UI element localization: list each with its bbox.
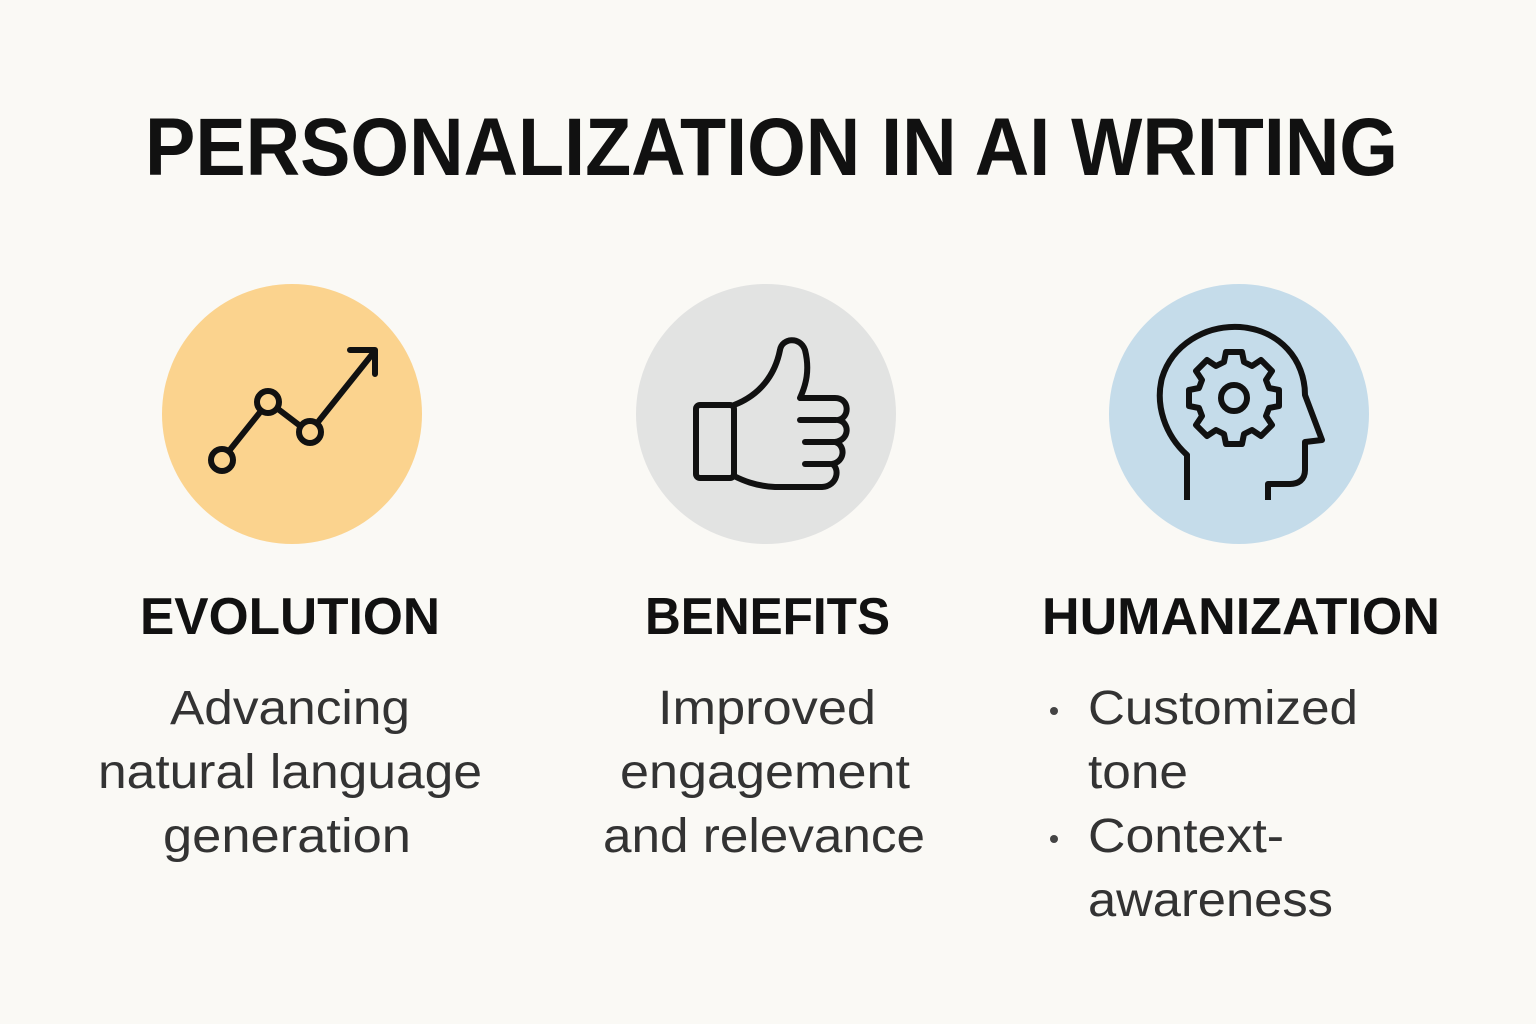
text: benefits description: and relevance [603, 810, 925, 863]
heading: benefits: BENEFITS [645, 588, 890, 646]
text: humanization bullets: Customized [1088, 682, 1358, 735]
panel: humanization [1042, 284, 1440, 927]
text: humanization bullets [1050, 682, 1358, 927]
text: evolution description: generation [163, 810, 411, 863]
title: PERSONALIZATION IN AI WRITING [145, 102, 1398, 193]
heading: humanization: HUMANIZATION [1042, 588, 1440, 646]
icon: growth chart [162, 284, 422, 544]
panel: benefits [603, 284, 925, 863]
text: benefits description: engagement [620, 746, 910, 799]
text: evolution description: natural language [98, 746, 482, 799]
text: evolution description [98, 682, 482, 863]
text: evolution description: Advancing [170, 682, 410, 735]
text: benefits description: Improved [658, 682, 876, 735]
icon: head with gear [1109, 284, 1369, 544]
heading: evolution: EVOLUTION [140, 588, 440, 646]
icon: thumbs up [636, 284, 896, 544]
text: benefits description [603, 682, 925, 863]
text: humanization bullets: awareness [1088, 874, 1333, 927]
text: humanization bullets: Context- [1088, 810, 1284, 863]
text: humanization bullets: tone [1088, 746, 1188, 799]
panel: evolution [98, 284, 482, 863]
